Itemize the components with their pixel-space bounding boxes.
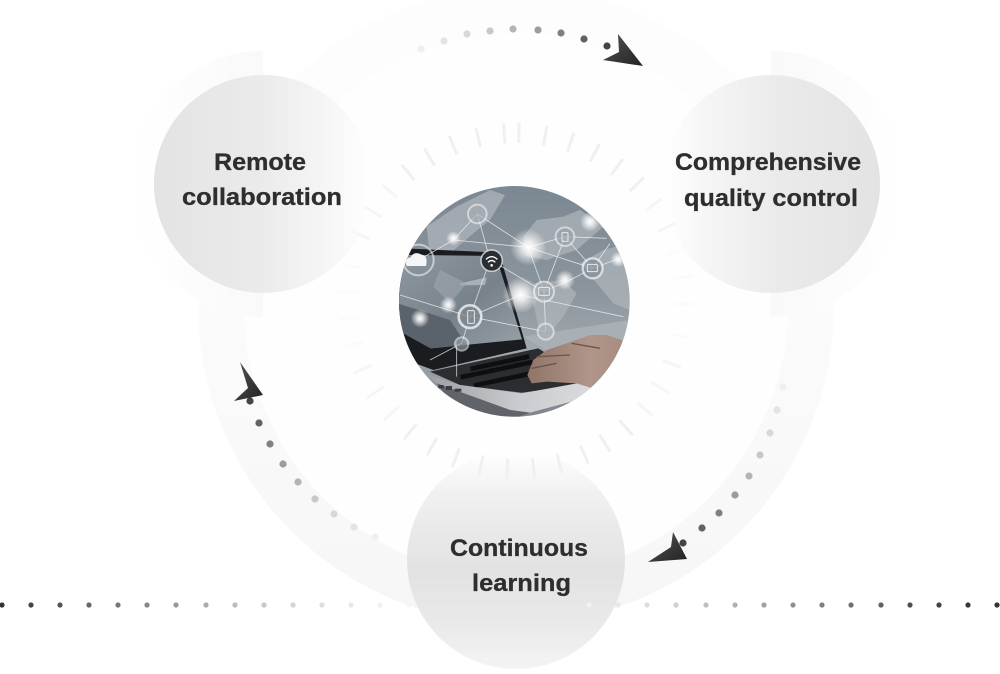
laptop screen xyxy=(397,255,522,348)
circle halos xyxy=(130,51,904,317)
label: continuous learning xyxy=(450,535,588,597)
horizontal dotted line xyxy=(0,602,1000,608)
label: remote collaboration: Remote xyxy=(214,149,306,176)
panel: remote collaboration xyxy=(154,75,372,293)
arrow: top dotted arc to comprehensive quality control xyxy=(417,25,643,66)
hand on keyboard xyxy=(527,335,623,388)
world map continents xyxy=(427,190,629,333)
laptop base xyxy=(428,375,602,413)
panel: comprehensive quality control xyxy=(662,75,880,293)
keyboard deck xyxy=(430,348,593,393)
label: comprehensive quality control: quality control xyxy=(684,185,858,212)
wifi icon xyxy=(486,257,497,266)
laptop lid xyxy=(397,249,527,370)
table surface xyxy=(524,320,628,350)
background ring xyxy=(221,11,811,601)
network nodes xyxy=(403,205,603,351)
device icons xyxy=(468,233,597,323)
radial tick marks xyxy=(338,123,694,479)
label: remote collaboration xyxy=(182,149,342,211)
label: continuous learning: learning xyxy=(472,570,571,597)
cloud icon xyxy=(406,253,427,266)
label: continuous learning: Continuous xyxy=(450,535,588,562)
light flares xyxy=(411,212,626,328)
label: comprehensive quality control: Comprehensive xyxy=(675,149,861,176)
label: remote collaboration: collaboration xyxy=(182,184,342,211)
central photo: laptop with global network xyxy=(399,186,630,417)
network lines xyxy=(400,214,623,377)
arrow: left dotted arc to remote collaboration xyxy=(234,362,379,541)
label: comprehensive quality control xyxy=(675,149,861,212)
arrow: right dotted arc to continuous learning xyxy=(648,383,787,562)
panel: continuous learning xyxy=(407,451,625,669)
